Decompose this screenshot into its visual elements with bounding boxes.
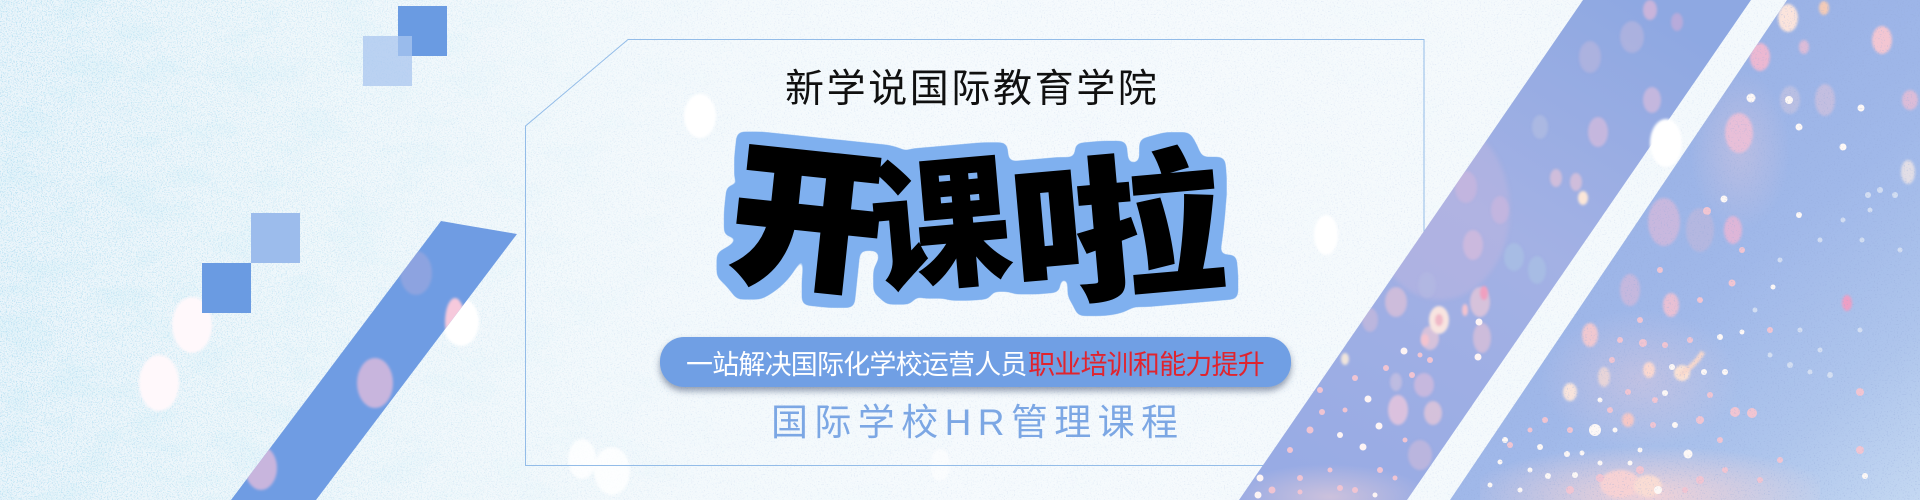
decorative frame [526,40,1424,466]
title: 开课啦 [725,130,1233,329]
title: 开课啦: 课 [864,141,1017,312]
subtitle: 国际学校HR管理课程 [771,402,1184,443]
heading: school name: 新学说国际教育学院 [785,68,1159,111]
diagonal band: far right with bokeh [1450,0,1920,500]
title: 开课啦: 开 [725,130,890,314]
white blob on stripe [1650,119,1682,167]
pill banner [660,337,1291,387]
square: top dark [398,6,447,56]
square: lower dark [202,263,251,313]
title: 开课啦: 啦 [1001,137,1233,329]
diagonal band: left [231,221,517,500]
decorative white bokeh on background [139,94,1338,495]
pill banner: 一站解决国际化学校运营人员职业培训和能力提升 [686,350,1264,380]
square: middle [251,213,300,263]
diagonal band: right large with bokeh [1239,0,1751,500]
square: top light [363,36,412,86]
